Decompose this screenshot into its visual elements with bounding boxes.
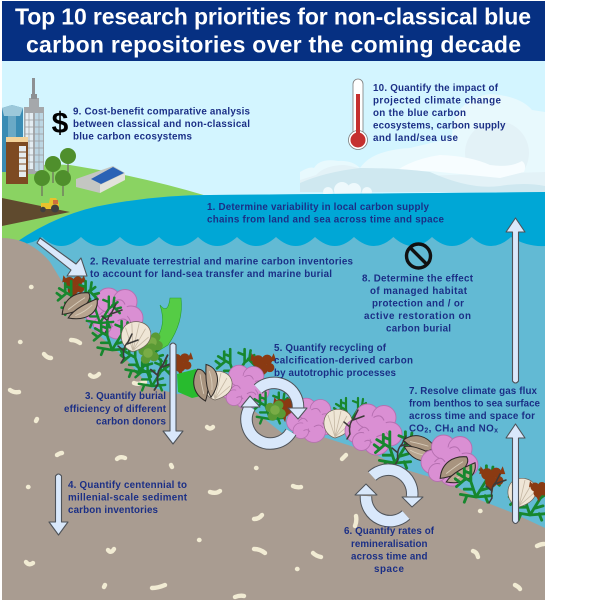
recycling arrows 6 (355, 470, 423, 521)
text: priority 2 (90, 256, 354, 280)
text: priority 4: 4. Quantify centennial to (68, 480, 187, 491)
icon: trees (34, 148, 76, 196)
text: priority 9: blue carbon ecosystems (73, 132, 193, 142)
central reef group (177, 349, 276, 409)
text: priority 1: 1. Determine variability in local carbon supply (207, 202, 430, 213)
text: priority 7 (409, 386, 541, 434)
arrow 1: upward to surface (506, 218, 525, 383)
text: priority 1 (207, 202, 445, 226)
icon: brick building (6, 137, 28, 184)
arrow 7: upward from benthos (506, 424, 525, 524)
text: priority 1: chains from land and sea across time and space (207, 214, 445, 226)
text: priority 3: carbon donors (96, 416, 167, 428)
text: priority 5 (274, 343, 413, 379)
reef inside recycling ring (252, 393, 309, 435)
text: priority 8 (362, 274, 474, 334)
recycling arrows 5 (241, 383, 307, 443)
farm field (2, 198, 70, 226)
text: priority 3: 3. Quantify burial (85, 391, 166, 402)
text: priority 9: 9. Cost-benefit comparative analysis (73, 106, 251, 118)
text: priority 6: space (374, 564, 405, 575)
title: carbon repositories over the coming decade (26, 32, 521, 58)
text: priority 4 (68, 480, 188, 516)
header bar (2, 1, 545, 61)
icon: solar warehouse (76, 166, 125, 193)
text: priority 4: millenial-scale sediment (68, 492, 188, 504)
icon: city buildings (2, 78, 44, 174)
text: priority 6: remineralisation (351, 539, 428, 550)
kelp (155, 298, 181, 350)
text: priority 7: from benthos to sea surface (409, 398, 541, 410)
text: priority 9 (73, 106, 251, 142)
text: priority 7: and NO (454, 424, 494, 434)
title: Top 10 research priorities for non-classical blue (15, 4, 531, 30)
text: priority 7: , CH (429, 424, 449, 434)
text: priority 8: protection and / or (372, 298, 464, 310)
left reef group (57, 275, 193, 390)
text: priority 7: 2 (424, 428, 428, 434)
text: priority 7: across time and space for (409, 411, 535, 422)
icon: prohibition sign (406, 244, 430, 268)
sky background (2, 60, 545, 200)
right reef group (287, 398, 555, 520)
icon: dollar sign: $ (52, 107, 69, 140)
text: priority 7: x (494, 428, 498, 434)
text: priority 10: projected climate change (373, 96, 502, 106)
text: priority 5: by autotrophic processes (274, 368, 397, 379)
text: priority 5: calcification-derived carbon (274, 356, 413, 366)
clouds (300, 94, 545, 198)
text: priority 4: carbon inventories (68, 505, 159, 516)
arrow 3: burial (163, 343, 183, 444)
arrow 4: sediment inventories (49, 474, 68, 535)
carbon fragments (10, 287, 544, 597)
icon: tractor (40, 198, 59, 212)
arrow 2: land to sea (37, 238, 87, 276)
text: priority 8: carbon burial (386, 324, 451, 334)
green hill (2, 165, 210, 245)
text: priority 6 (344, 526, 435, 575)
text: priority 2: to account for land-sea transfer and marine burial (90, 269, 332, 280)
text: priority 6: 6. Quantify rates of (344, 526, 435, 537)
text: priority 10: 10. Quantify the impact of (373, 83, 499, 94)
sea surface band (15, 192, 545, 246)
water (2, 192, 545, 542)
text: priority 5: 5. Quantify recycling of (274, 343, 387, 354)
text: priority 2: 2. Revaluate terrestrial and marine carbon inventories (90, 256, 354, 268)
text: priority 8: 8. Determine the effect (362, 274, 474, 284)
sediment (2, 238, 545, 600)
text: priority 8: of managed habitat (370, 286, 468, 297)
text: priority 10: and land/sea use (373, 133, 459, 144)
text: priority 10: on the blue carbon (373, 108, 466, 119)
text: priority 3 (64, 391, 167, 428)
title (15, 4, 531, 58)
text: priority 7: 7. Resolve climate gas flux (409, 386, 538, 397)
reef: benthic community (57, 275, 555, 520)
text: priority 3: efficiency of different (64, 404, 167, 415)
text: priority 8: active restoration on (364, 311, 471, 322)
text: priority 10: ecosystems, carbon supply (373, 120, 506, 132)
text: priority 7: 4 (450, 428, 454, 434)
text: priority 10 (373, 83, 506, 144)
text: priority 9: between classical and non-classical (73, 119, 250, 130)
text: priority 6: across time and (351, 552, 428, 562)
text: priority 7: CO (409, 424, 424, 434)
icon: thermometer (348, 79, 368, 150)
